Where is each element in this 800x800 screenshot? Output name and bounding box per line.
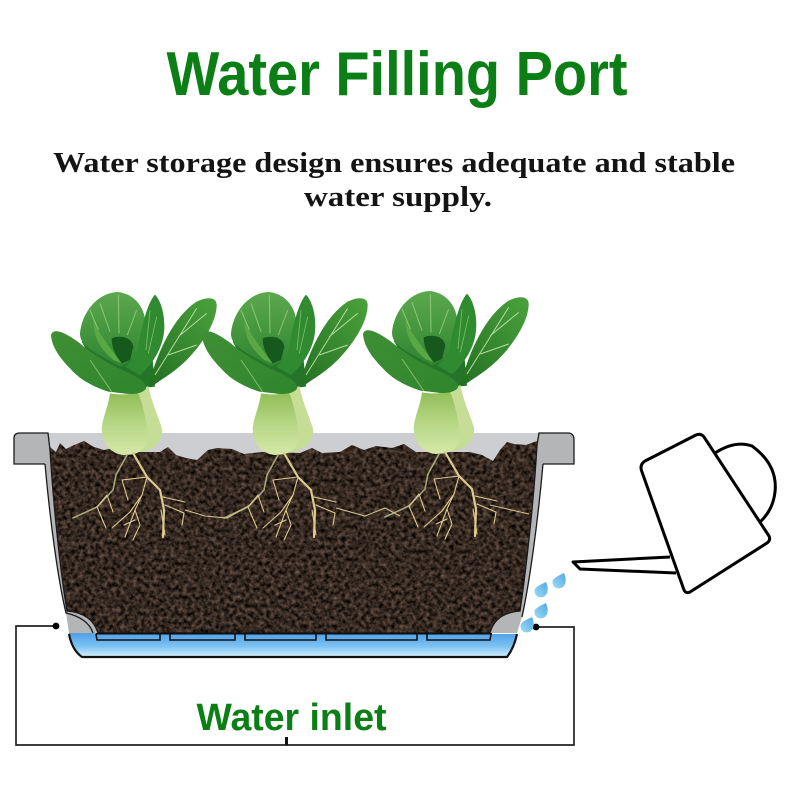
plant 2 bbox=[202, 292, 368, 540]
can handle bbox=[715, 444, 775, 522]
title: Water Filling Port bbox=[166, 40, 628, 109]
can spout bbox=[573, 557, 676, 573]
connecting root lines bbox=[185, 505, 529, 518]
reservoir outline bbox=[69, 634, 517, 657]
pot interior back wall bbox=[48, 433, 540, 463]
soil floor line bbox=[96, 632, 492, 634]
subtitle: water supply. bbox=[304, 181, 492, 213]
icon: water drops bbox=[520, 573, 566, 632]
plant 1 bbox=[51, 292, 217, 540]
soil bbox=[45, 436, 545, 636]
icon: watering can bbox=[573, 434, 775, 593]
plant 3 bbox=[363, 291, 529, 539]
planter pot cross-section bbox=[14, 433, 574, 657]
water inlet bracket line bbox=[16, 623, 574, 745]
right wall and rim bbox=[490, 433, 574, 633]
bok choy plants bbox=[51, 291, 529, 540]
water inlet label: Water inlet bbox=[196, 697, 387, 739]
reservoir platform supports bbox=[96, 634, 491, 640]
water reservoir bbox=[69, 633, 517, 657]
can body bbox=[641, 434, 770, 593]
left wall and rim bbox=[14, 433, 98, 633]
subtitle: Water storage design ensures adequate and stable bbox=[53, 147, 735, 179]
subtitle bbox=[53, 147, 735, 213]
